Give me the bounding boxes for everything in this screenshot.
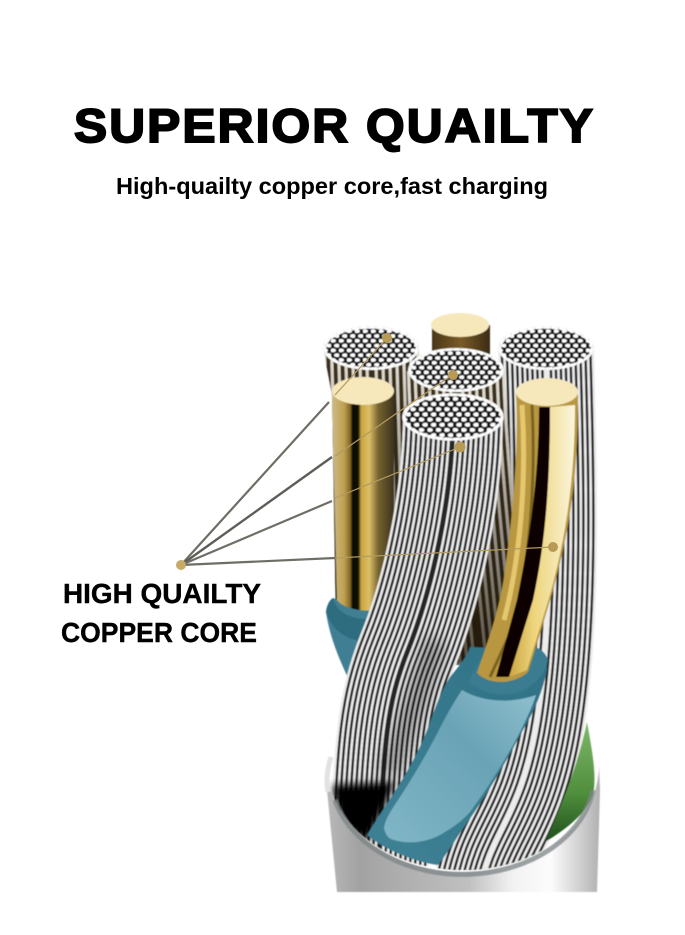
grey shading along cable — [388, 640, 436, 775]
left blue sleeve lip — [326, 598, 376, 641]
right gold core — [477, 378, 578, 682]
right silver cable — [480, 326, 594, 890]
leader lines and dots — [176, 333, 558, 570]
label: high quality copper core — [61, 578, 261, 648]
left blue sleeve — [326, 598, 376, 682]
sleeve highlight — [384, 690, 536, 842]
green insulated wire — [545, 722, 594, 842]
connector inner shadow arc — [335, 790, 593, 874]
metal connector tube — [327, 757, 600, 892]
front silver cable — [332, 393, 504, 885]
back left silver bundle — [324, 326, 420, 600]
left gold core — [332, 377, 394, 611]
title: SUPERIOR QUAILTY — [74, 99, 595, 152]
subtitle: High-quailty copper core,fast charging — [116, 173, 548, 199]
connector rim highlight — [327, 757, 331, 792]
back gold core — [431, 313, 490, 355]
sleeve lip — [468, 648, 548, 695]
centre blue sleeve — [367, 647, 548, 865]
dark shadow at cable base — [332, 782, 395, 842]
illustration: cable cutaway — [323, 313, 600, 892]
label: high quality copper core: HIGH QUAILTY — [63, 578, 261, 609]
middle silver bundle — [405, 348, 515, 665]
label: high quality copper core: COPPER CORE — [61, 617, 257, 648]
dark shade on middle bundle — [405, 395, 515, 665]
